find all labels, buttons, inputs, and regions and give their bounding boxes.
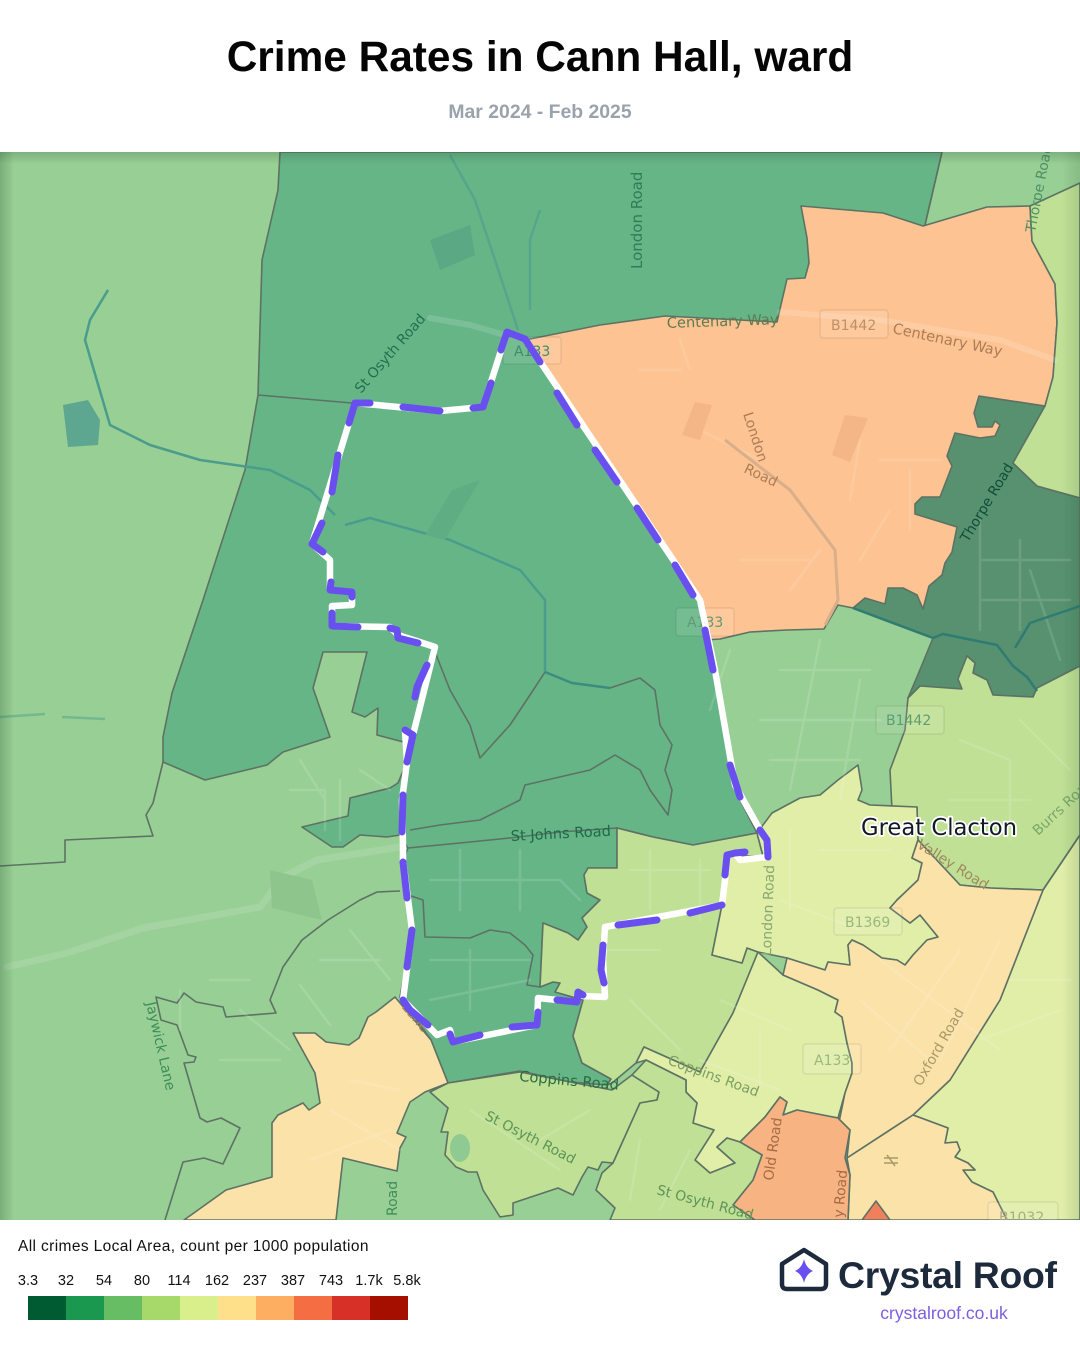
- legend scale labels: 237: [243, 1273, 267, 1289]
- map base: light green areas: [0, 152, 1080, 1220]
- icon: house with star: [780, 1248, 828, 1292]
- road labels: London Road: [759, 865, 778, 956]
- area: yellow-green east Burrs Road: [890, 656, 1080, 890]
- road labels: Oxford Road: [911, 1006, 968, 1089]
- road labels: Lane: [398, 999, 432, 1036]
- wordmark: Crystal Roof: [838, 1254, 1057, 1296]
- road number badges: B1032: [999, 1210, 1044, 1226]
- road labels: Thorpe Road: [1023, 144, 1056, 235]
- logo: Crystal Roof: [780, 1248, 1058, 1296]
- title: Crime Rates in Cann Hall, ward: [227, 33, 853, 80]
- choropleth map: [0, 152, 1080, 1220]
- road number badges: [503, 310, 1058, 1228]
- road labels: Coppins Road: [519, 1068, 620, 1094]
- legend colour ramp: [28, 1296, 408, 1320]
- legend title: All crimes Local Area, count per 1000 population: [18, 1238, 369, 1255]
- legend scale labels: 743: [319, 1273, 343, 1289]
- road labels: Road: [741, 461, 780, 490]
- legend scale labels: 80: [134, 1273, 150, 1289]
- road labels: London Road: [628, 172, 646, 269]
- street network: [7, 312, 1070, 1210]
- legend scale labels: 387: [281, 1273, 305, 1289]
- area: yellow-green south of ward: [540, 828, 763, 1085]
- area: mid green north and ward: [163, 152, 942, 1085]
- legend scale labels: 32: [58, 1273, 74, 1289]
- legend scale labels: 54: [96, 1273, 112, 1289]
- road labels: St Johns Road: [510, 823, 611, 845]
- legend scale labels: 3.3: [18, 1273, 38, 1289]
- place label: Great Clacton: Great Clacton: [861, 815, 1017, 841]
- road labels: Jaywick Lane: [142, 999, 178, 1092]
- road number badges: B1442: [886, 713, 931, 729]
- area: dark green Thorpe Road: [853, 396, 1080, 698]
- subtitle: date range: Mar 2024 - Feb 2025: [448, 101, 632, 123]
- area: pale orange Jaywick side: [184, 997, 448, 1220]
- road labels: Thorpe Road: [957, 461, 1017, 546]
- road labels: Road: [385, 1181, 401, 1216]
- area: pale green London Road: [712, 765, 938, 970]
- rivers and water: [0, 155, 1080, 1162]
- road labels: St Osyth Road: [655, 1182, 755, 1224]
- west boundaries: [0, 152, 1080, 1220]
- area: orange Clacton north: [525, 206, 1057, 640]
- website url: crystalroof.co.uk: [880, 1303, 1008, 1323]
- area: pale orange Oxford Road: [783, 840, 1043, 1158]
- legend scale labels: 114: [167, 1273, 191, 1289]
- road labels: y Road: [831, 1169, 851, 1218]
- road number badges: A133: [687, 615, 723, 631]
- legend scale labels: 1.7k: [355, 1273, 383, 1289]
- road labels: Centenary Way: [667, 311, 779, 332]
- road labels: St Osyth Road: [482, 1108, 578, 1168]
- ward boundary: Cann Hall: [312, 332, 768, 1042]
- legend scale labels: 162: [205, 1273, 229, 1289]
- area: pale orange station: [847, 1115, 1007, 1220]
- area: mid green inner boundaries: [258, 395, 672, 987]
- road labels: [142, 144, 1080, 1224]
- legend scale labels: [18, 1273, 421, 1289]
- road number badges: B1369: [845, 915, 890, 931]
- road number badges: B1442: [831, 318, 876, 334]
- legend scale labels: 5.8k: [393, 1273, 421, 1289]
- road number badges: A133: [514, 344, 550, 360]
- map edge vignette: [0, 152, 1080, 1220]
- road labels: Coppins Road: [666, 1053, 761, 1101]
- area: red tip: [862, 1201, 890, 1220]
- icon: railway station: [884, 1155, 898, 1166]
- road number badges: A133: [814, 1053, 850, 1069]
- road labels: Valley Road: [914, 837, 991, 893]
- road labels: St Osyth Road: [352, 311, 429, 397]
- area: pale green A133: [636, 952, 852, 1173]
- area: yellow-green St Osyth Road east: [596, 1060, 762, 1220]
- area: yellow-green north east: [1013, 183, 1080, 498]
- road labels: London: [739, 410, 770, 464]
- road labels: Old Road: [761, 1117, 786, 1182]
- area: orange Old Road: [733, 1097, 850, 1220]
- area: yellow-green St Osyth Road: [430, 1072, 659, 1217]
- road labels: Centenary Way: [891, 320, 1004, 360]
- area: pale green south east: [913, 835, 1080, 1220]
